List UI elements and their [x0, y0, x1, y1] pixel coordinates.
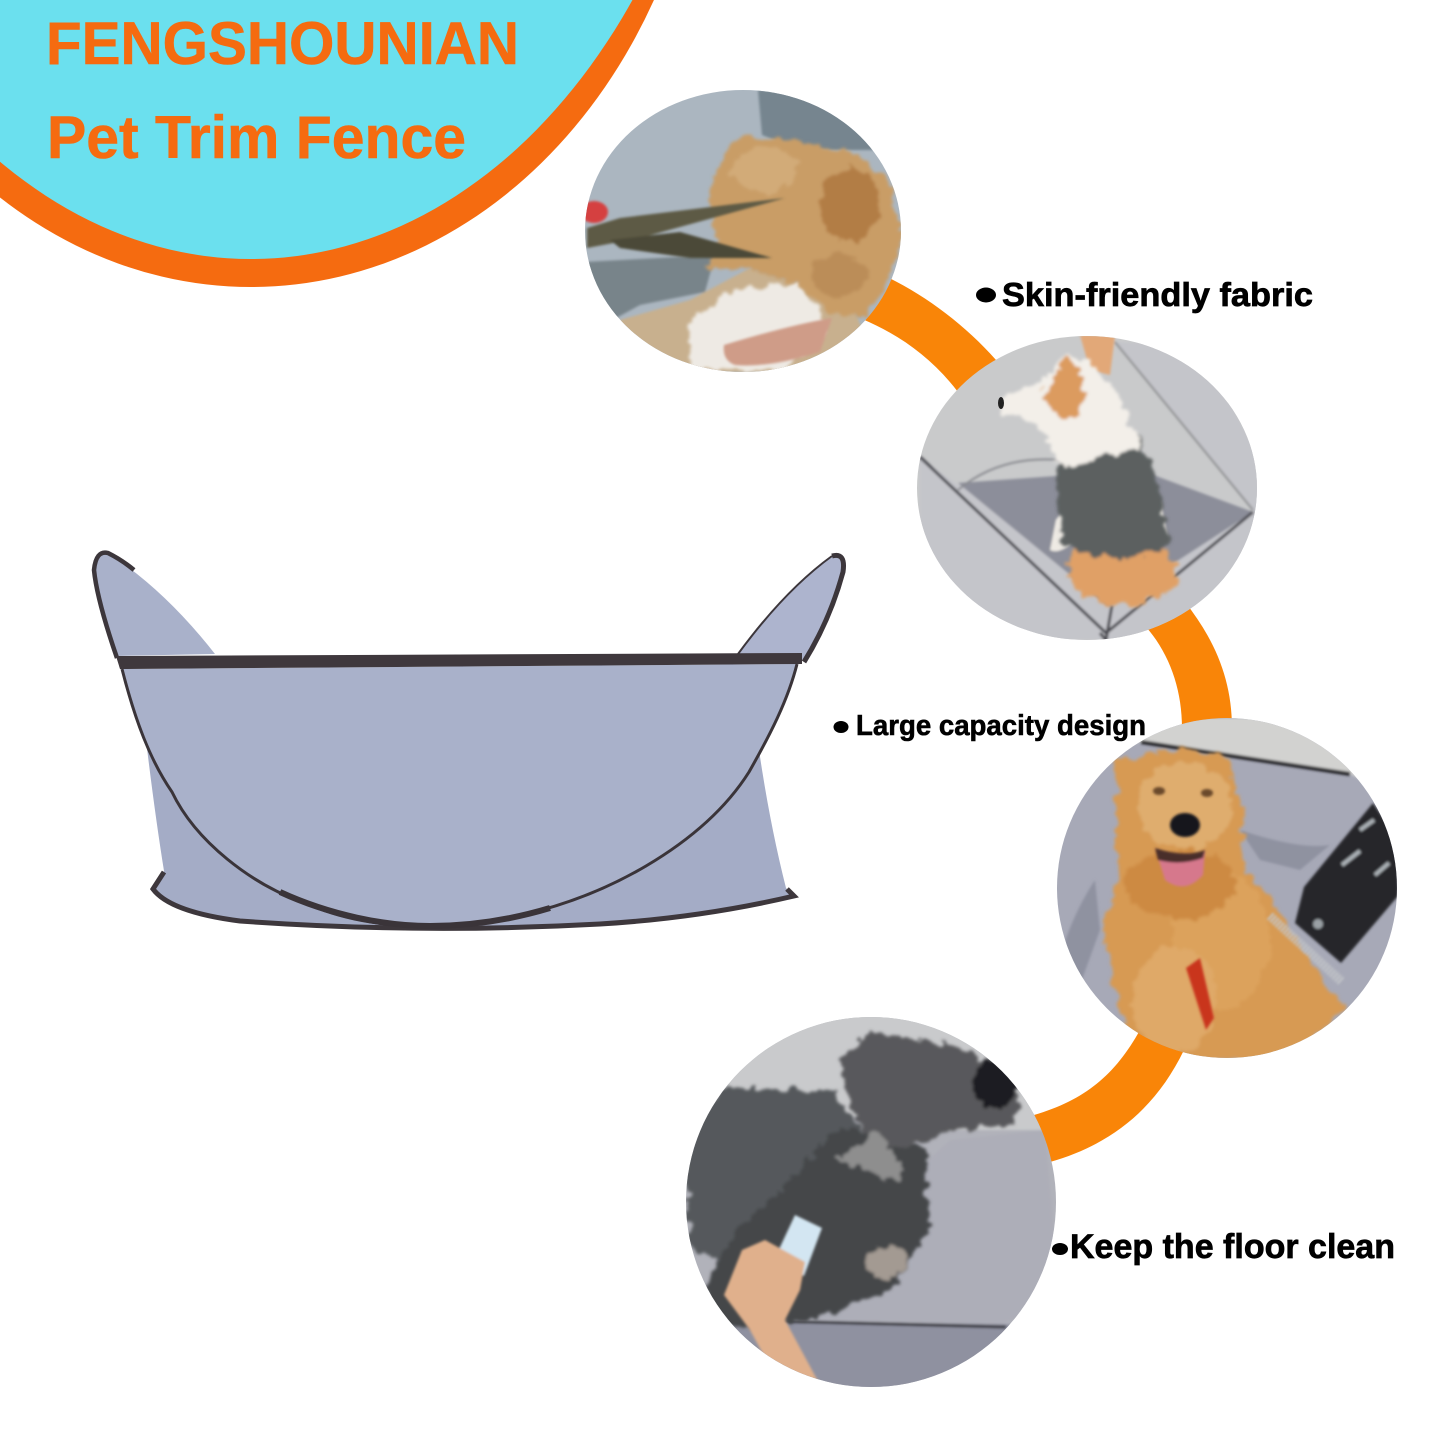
fence body: [146, 740, 794, 930]
fence front panel: [122, 664, 797, 926]
fence top band: [116, 653, 802, 669]
header badge: [0, 0, 731, 287]
fence bottom rim: [153, 872, 794, 928]
feature: skin-friendly fabric: Skin-friendly fabric: [1002, 276, 1313, 313]
orange connector arcs: [862, 276, 1232, 1162]
product heading: Pet Trim Fence: [47, 104, 466, 171]
fence arc seam: [122, 664, 797, 926]
corgi nose: [998, 397, 1004, 409]
photo: schnauzer being groomed: [684, 1015, 1060, 1390]
fence seam thick lower segment: [280, 892, 550, 926]
photo: corgi on the fence mat: [915, 335, 1260, 645]
photo: golden retriever with clipper: [1055, 718, 1400, 1060]
feature: keep the floor clean: Keep the floor clean: [1070, 1228, 1395, 1266]
brand heading: FENGSHOUNIAN: [46, 10, 519, 77]
feature: large capacity design: Large capacity design: [856, 710, 1146, 742]
photo: scissors trimming dog fur: [580, 90, 905, 375]
product: folded grooming fence: [94, 553, 844, 930]
fence ears: [94, 553, 844, 662]
